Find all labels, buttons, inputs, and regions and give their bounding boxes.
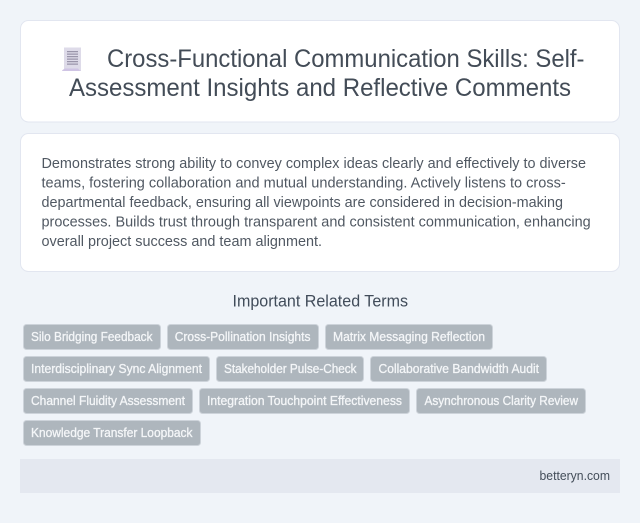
tag: Silo Bridging Feedback <box>31 330 153 344</box>
title <box>69 45 584 102</box>
tag: Asynchronous Clarity Review <box>424 394 579 408</box>
tag <box>24 356 210 382</box>
footer: betteryn.com <box>540 469 610 483</box>
panel: description card <box>20 134 620 272</box>
icon: scroll document <box>62 48 81 71</box>
footer <box>20 459 620 493</box>
tag: Stakeholder Pulse-Check <box>224 362 357 376</box>
tag: Integration Touchpoint Effectiveness <box>207 394 402 408</box>
title: Assessment Insights and Reflective Comments <box>69 74 571 102</box>
heading: important related terms: Important Related Terms <box>232 292 408 310</box>
tag: Channel Fluidity Assessment <box>31 394 185 408</box>
tag <box>200 388 410 414</box>
tag <box>24 388 192 414</box>
tag <box>24 324 160 350</box>
text block: description: departmental feedback, ensuring all viewpoints are considered in decision-making <box>42 194 563 211</box>
tag: Cross-Pollination Insights <box>175 330 310 344</box>
tag <box>370 356 546 382</box>
text block: description: overall project success and team alignment. <box>42 233 322 250</box>
text block: description <box>42 155 591 250</box>
text block: description: teams, fostering collaboration and mutual understanding. Actively listens to cross- <box>42 174 566 192</box>
text block: description: Demonstrates strong ability to convey complex ideas clearly and effectively to diverse <box>42 155 586 172</box>
tag: Collaborative Bandwidth Audit <box>378 362 540 376</box>
tag <box>416 388 586 414</box>
panel: tag list <box>24 324 586 446</box>
text block: description: processes. Builds trust through transparent and consistent communication, enhancing <box>42 214 591 230</box>
panel: title card <box>20 20 620 122</box>
tag <box>168 324 318 350</box>
tag: Interdisciplinary Sync Alignment <box>31 362 202 376</box>
tag <box>24 420 200 446</box>
title: Cross-Functional Communication Skills: Self- <box>107 45 584 73</box>
tag <box>216 356 364 382</box>
tag <box>326 324 492 350</box>
tag: Matrix Messaging Reflection <box>333 330 485 344</box>
tag: Knowledge Transfer Loopback <box>31 426 193 440</box>
